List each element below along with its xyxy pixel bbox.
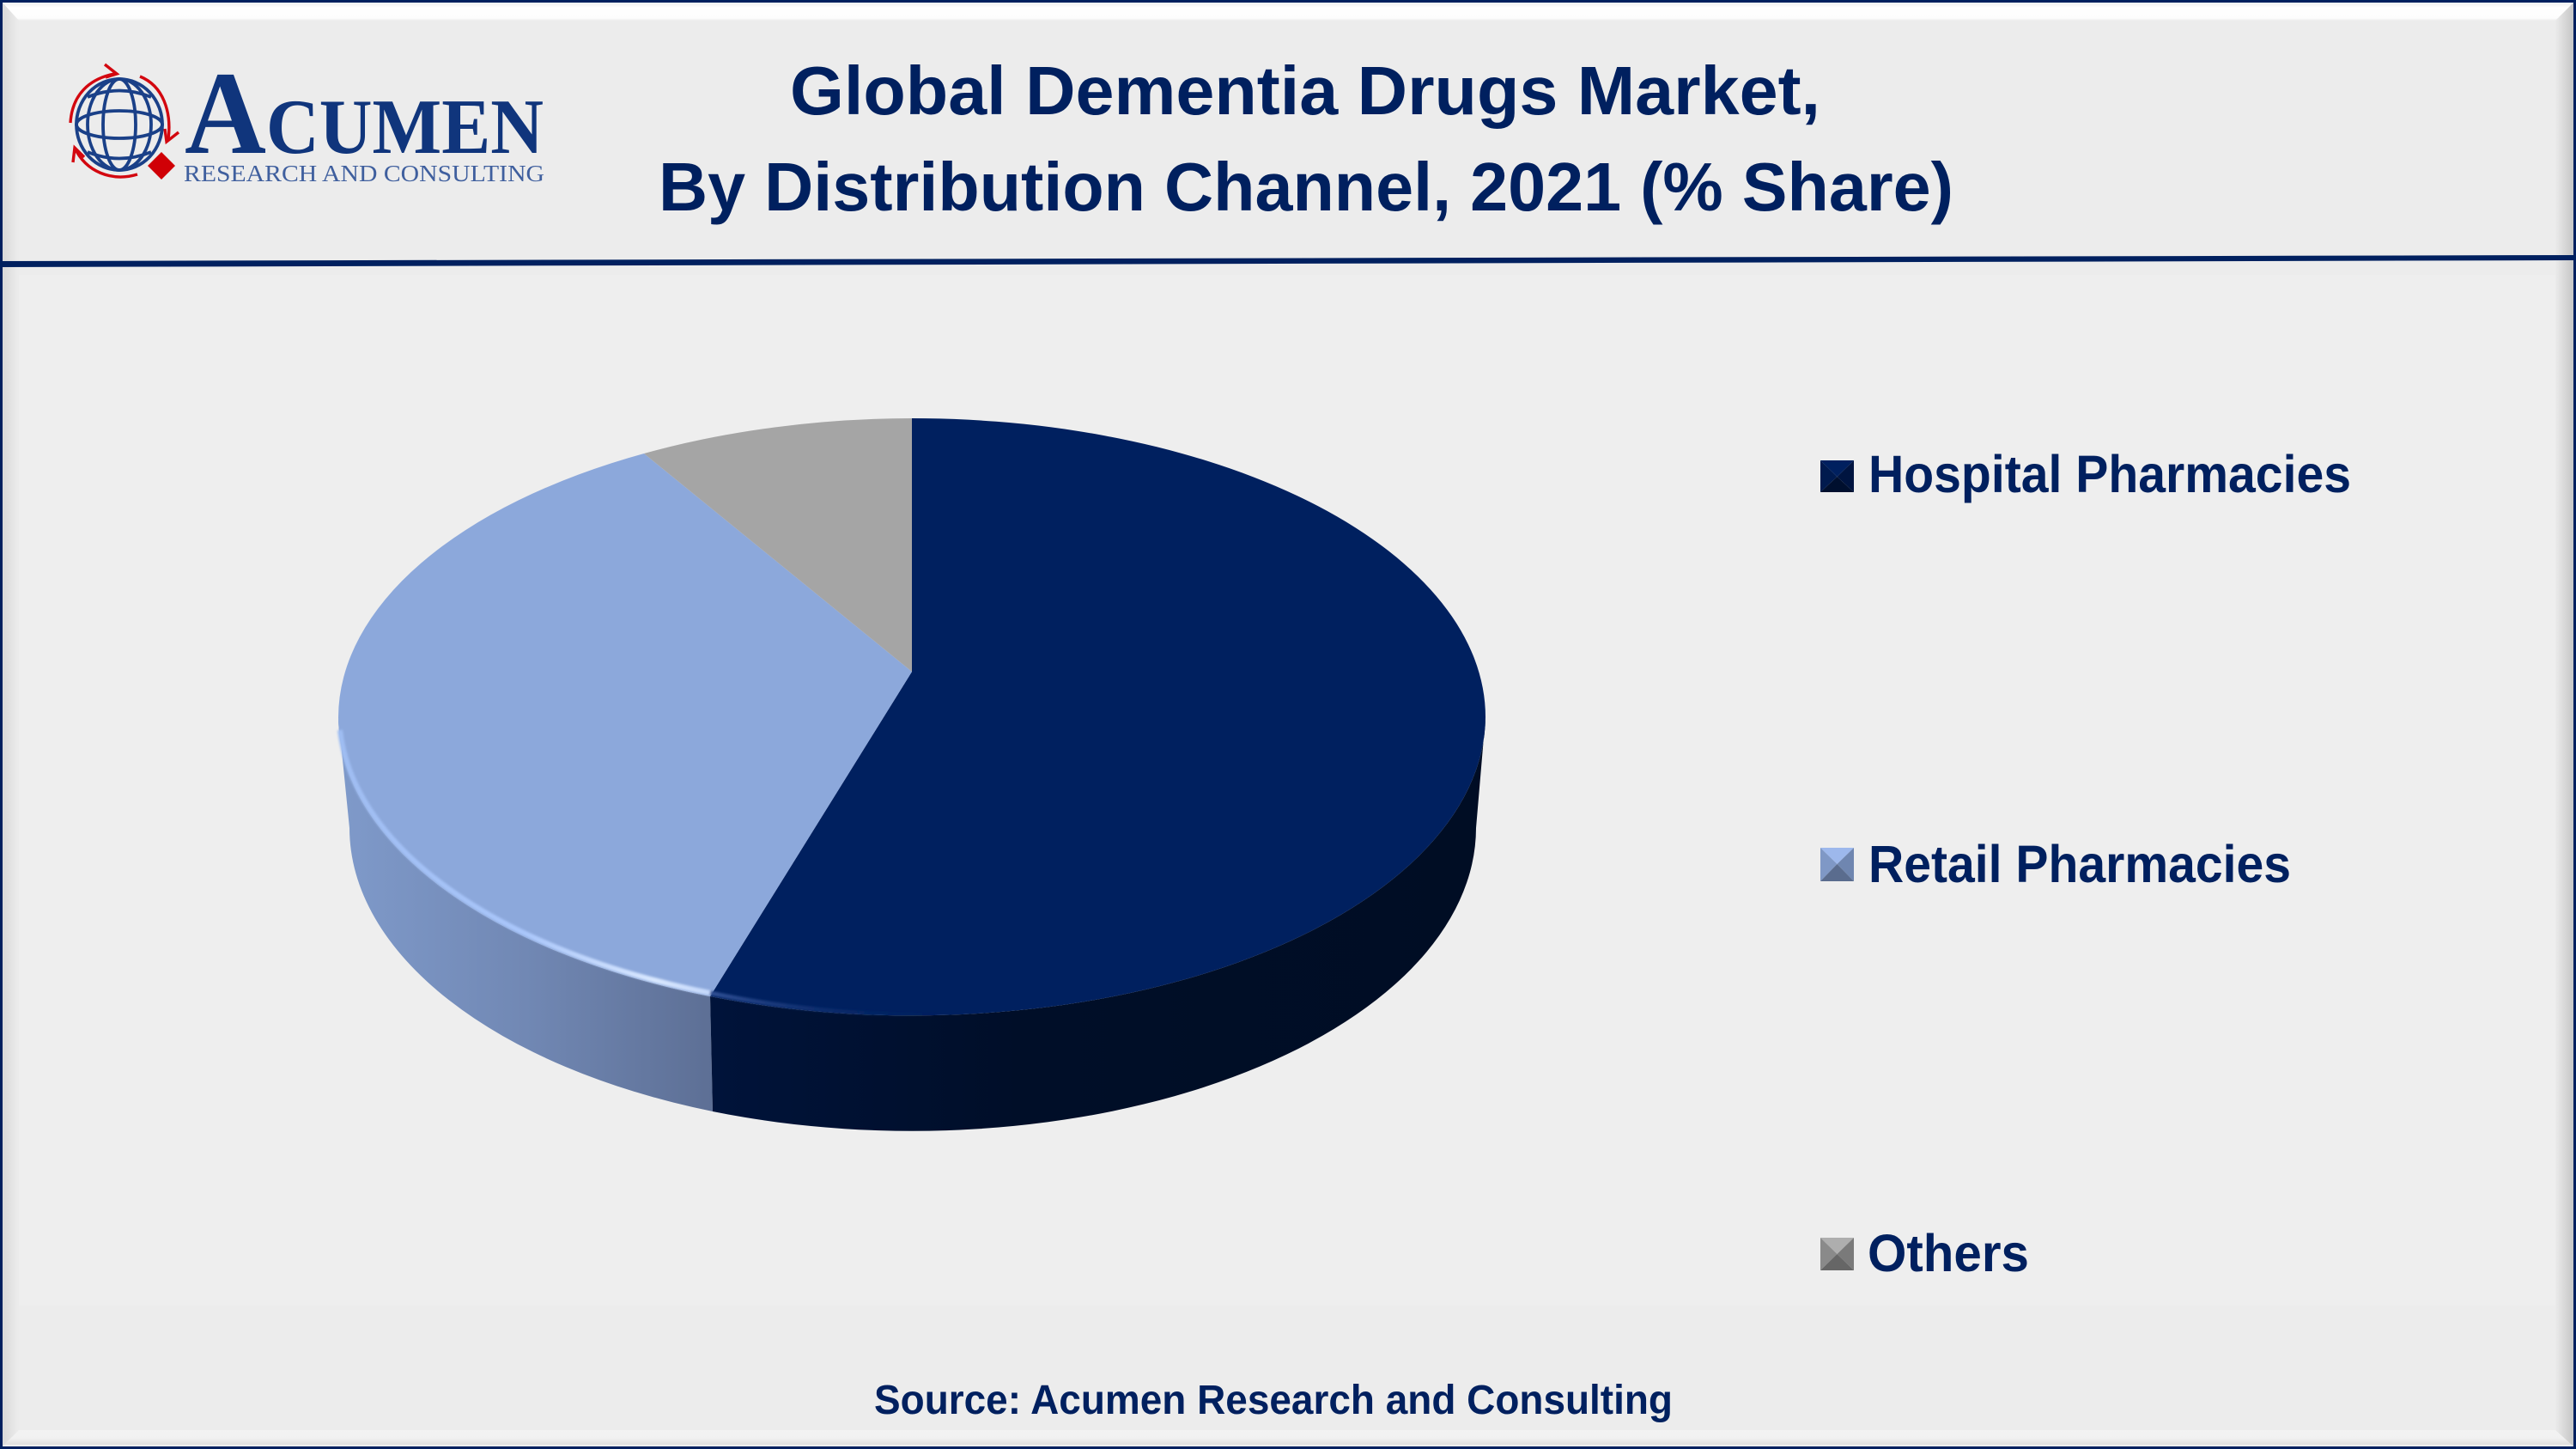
slice: hospital pharmacies [710,418,1485,1015]
slice: others [644,418,912,672]
slice: retail pharmacies [338,454,912,996]
header divider line [0,255,2576,267]
title: By Distribution Channel, 2021 (% Share) [659,149,1953,225]
legend item: hospital pharmacies: Hospital Pharmacies [1868,445,2351,503]
logo wordmark: RESEARCH AND CONSULTING [184,161,544,186]
legend item: retail pharmacies: Retail Pharmacies [1868,835,2291,893]
icon: red diamond [148,152,175,180]
rim highlight [340,730,945,1014]
legend item: others: Others [1868,1224,2029,1282]
pie side: hospital pharmacies [710,717,1485,1131]
source note: Source: Acumen Research and Consulting [874,1378,1673,1423]
icon: red circular arrows [70,64,179,177]
title: Global Dementia Drugs Market, [790,52,1820,129]
pie chart [338,418,1485,1131]
title [659,52,1953,225]
logo wordmark [184,47,544,186]
logo: Acumen Research and Consulting [70,47,544,186]
icon: globe [76,79,162,170]
legend [1820,445,2351,1282]
pie side: retail pharmacies [338,717,713,1111]
logo wordmark: A [185,47,266,179]
logo wordmark: CUMEN [266,83,544,170]
